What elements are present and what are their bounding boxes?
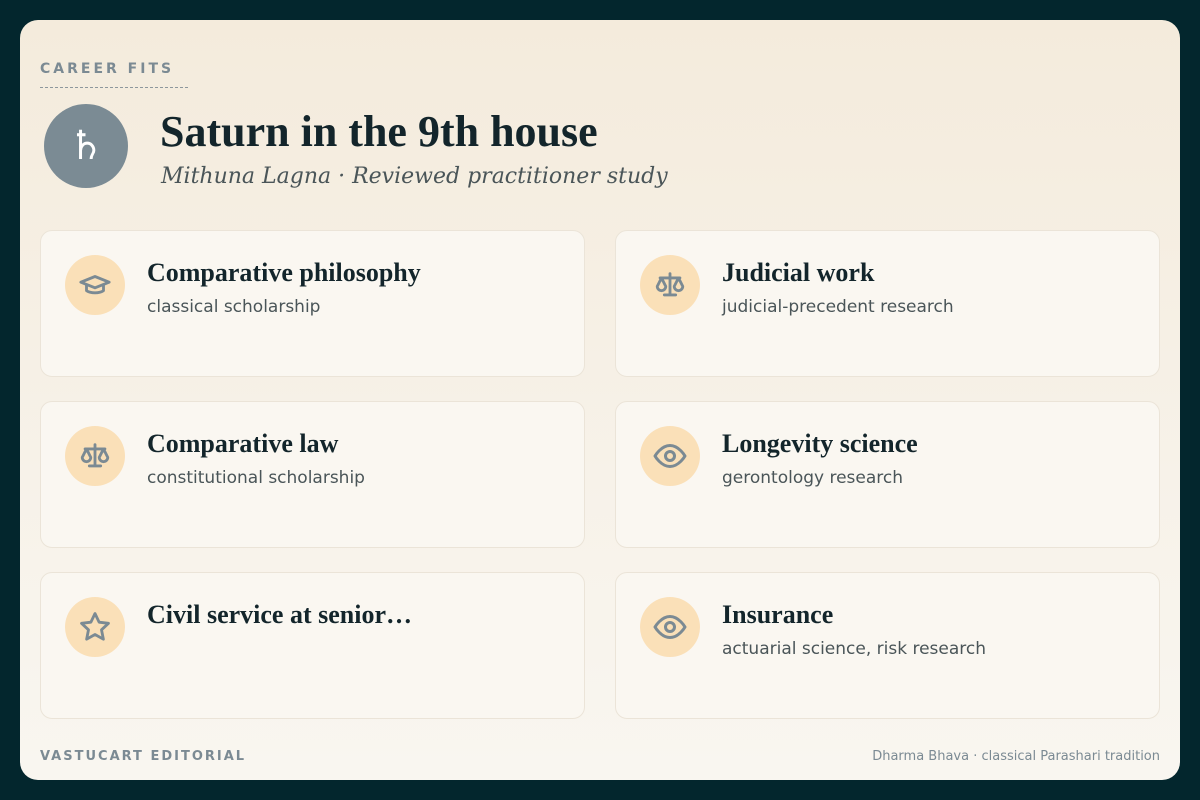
footer: source: Dharma Bhava · classical Parashari tradition [872,749,1160,764]
kicker: career fits [40,61,188,88]
card: civil service [40,572,585,719]
card desc: gerontology research [722,468,903,488]
card title: Comparative philosophy [147,258,421,287]
card title: Comparative law [147,429,338,458]
icon: graduation cap [65,255,125,315]
card: comparative law [40,401,585,548]
card: insurance [615,572,1160,719]
icon: eye [640,597,700,657]
card: longevity science [615,401,1160,548]
card: comparative philosophy [40,230,585,377]
card title: Judicial work [722,258,874,287]
icon: star [65,597,125,657]
icon: saturn avatar: ♄ [68,123,104,169]
footer: brand: VASTUCART EDITORIAL [40,749,246,764]
icon: scales [640,255,700,315]
title: Saturn in the 9th house [160,107,598,156]
card title: Insurance [722,600,833,629]
card desc: judicial-precedent research [722,297,954,317]
icon: scales [65,426,125,486]
card: judicial work [615,230,1160,377]
card title: Longevity science [722,429,918,458]
card desc: classical scholarship [147,297,320,317]
icon: saturn avatar [44,104,128,188]
card desc: constitutional scholarship [147,468,365,488]
card desc: actuarial science, risk research [722,639,986,659]
card title: Civil service at senior… [147,600,412,629]
subtitle: Mithuna Lagna · Reviewed practitioner study [161,164,668,189]
icon: eye [640,426,700,486]
kicker: career fits: CAREER FITS [40,61,174,77]
